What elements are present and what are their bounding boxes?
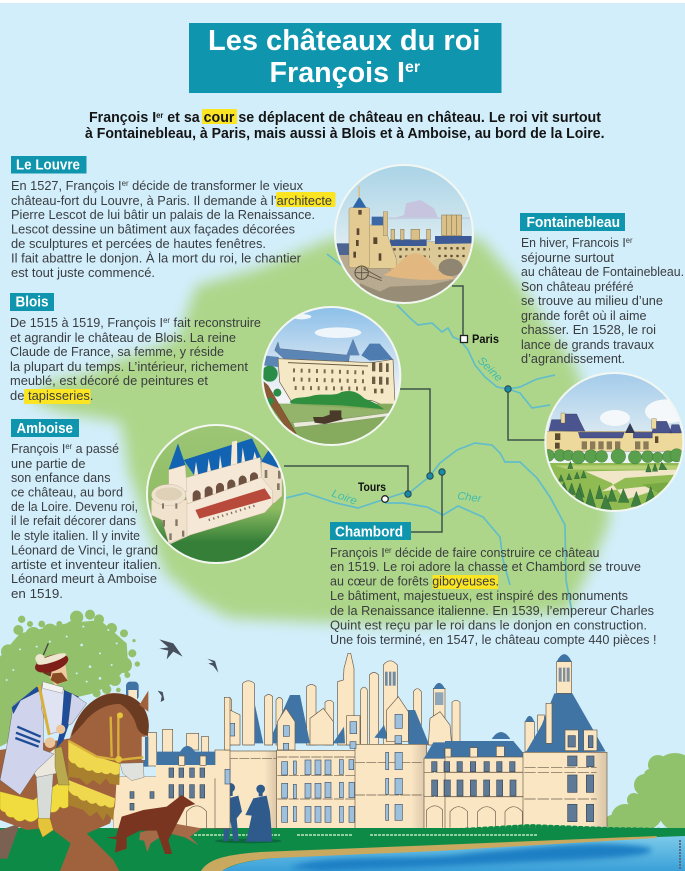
highlight — [24, 389, 90, 404]
heading: Fontainebleau — [526, 214, 620, 231]
body text: François I — [330, 545, 387, 560]
body text — [10, 315, 261, 403]
illustration: right tree — [605, 753, 685, 832]
sand bank — [201, 836, 657, 871]
marker: Tours — [382, 496, 388, 502]
body text: chasser. En 1528, le roi — [521, 322, 656, 337]
label: Tours: Tours — [358, 480, 386, 494]
body text: De 1515 à 1519, François I — [10, 315, 167, 330]
river labels — [330, 355, 505, 508]
illustration: François Ier on horseback — [0, 643, 149, 871]
body text: meublé, est décoré de peintures et — [10, 373, 208, 388]
blue roofs — [255, 695, 429, 745]
body text — [11, 441, 161, 601]
lantern — [557, 654, 572, 693]
body text: Une fois terminé, en 1547, le château compte 440 pièces ! — [330, 632, 656, 647]
body text: château-fort du Louvre, à Paris. Il demande à l’architecte — [11, 193, 332, 208]
body text: de la Loire. Devenu roi, — [11, 499, 138, 514]
body text: au cœur de forêts giboyeuses. — [330, 574, 499, 588]
panel: Le Louvre — [11, 156, 336, 280]
wing — [445, 741, 525, 758]
body text: a passé — [72, 441, 119, 456]
label: Paris: Paris — [472, 332, 499, 346]
body text: décide de transformer le vieux — [129, 178, 303, 193]
intro text: François I — [89, 109, 160, 126]
map markers — [358, 332, 511, 502]
towers and body — [217, 751, 277, 828]
heading: Amboise — [16, 420, 73, 437]
title: Les châteaux du roi — [208, 25, 480, 57]
body text: Léonard meurt à Amboise — [11, 571, 157, 586]
body text: er — [626, 236, 633, 245]
illustration: couple silhouettes — [215, 783, 282, 843]
king — [0, 643, 87, 837]
yellow trappings — [0, 712, 143, 822]
panel: Amboise — [11, 419, 161, 601]
title: François I — [270, 57, 406, 89]
body text: er — [163, 316, 170, 325]
intro text — [85, 109, 604, 142]
body text: fait reconstruire — [170, 315, 261, 330]
illustration: distant wing of castle — [113, 697, 230, 828]
illustration: Chambord castle, right wing and tower — [444, 654, 607, 828]
body text: d’agrandissement. — [521, 351, 625, 366]
illustration: Chambord castle, left and centre — [217, 653, 460, 828]
body text: en 1519. — [11, 586, 63, 601]
river labels: Cher — [457, 490, 483, 505]
round tower — [523, 752, 607, 828]
title: er — [405, 59, 420, 76]
body text: de sculptures et percées de hautes fenêtres. — [11, 236, 266, 251]
body text: Léonard de Vinci, le grand — [11, 542, 158, 558]
body text: artiste et inventeur italien. — [11, 557, 161, 572]
body text: une partie de — [11, 456, 86, 471]
illustration: Fontainebleau medallion — [544, 372, 684, 512]
intro text: à Fontainebleau, à Paris, mais aussi à Blois et à Amboise, au bord de la Loire. — [85, 125, 604, 142]
body text — [11, 178, 332, 280]
intro text: er — [156, 111, 163, 120]
body text: ce château, au bord — [11, 484, 123, 500]
body text: Quint est reçu par le roi dans le donjon en construction. — [330, 618, 647, 632]
body text: Il fait abattre le donjon. À la mort du roi, le chantier — [11, 250, 302, 266]
body text: En hiver, Francois I — [521, 235, 632, 250]
body text: est tout juste commencé. — [11, 265, 155, 280]
marker: Paris — [460, 336, 468, 342]
body text: la plupart du temps. L’intérieur, richement — [10, 359, 248, 374]
body text: il le refait décorer dans — [11, 513, 136, 528]
body text: de tapisseries. — [10, 388, 94, 403]
intro text: et sa cour se déplacent de château en château. Le roi vit surtout — [163, 109, 601, 126]
illustration: tree behind king — [0, 610, 140, 747]
body text: François I — [11, 441, 68, 456]
small corner turret — [525, 715, 544, 752]
body text: En 1527, François I — [11, 178, 124, 193]
rivers — [286, 254, 572, 612]
highlight — [432, 575, 498, 589]
body text: de la Renaissance italienne. En 1539, l’empereur Charles — [330, 603, 654, 618]
chimneys and skyline — [225, 653, 460, 745]
illustration: Louvre medallion — [334, 164, 474, 304]
body text: Lescot dessine un bâtiment aux façades décorées — [11, 222, 295, 236]
body text: Le bâtiment, majestueux, est inspiré des monuments — [330, 588, 628, 603]
body text: er — [122, 179, 129, 188]
body text: le style italien. Il y invite — [11, 528, 140, 543]
river labels: Loire — [330, 488, 359, 508]
body text: séjourne surtout — [521, 250, 614, 265]
panel: Fontainebleau — [520, 213, 684, 366]
body text: se trouve au milieu d’une — [521, 293, 663, 308]
river labels: Seine — [475, 355, 505, 384]
map of France — [30, 238, 610, 626]
title — [189, 23, 502, 93]
body text: Pierre Lescot de lui bâtir un palais de la Renaissance. — [11, 207, 315, 222]
dormers and skyline mass — [227, 697, 452, 750]
heading: Blois — [16, 294, 48, 310]
water — [222, 836, 685, 871]
body text: grande forêt où il aime — [521, 308, 646, 323]
illustration: Amboise medallion — [147, 425, 285, 563]
heading: Chambord — [335, 524, 403, 540]
illustration: ground, sand and water — [0, 826, 685, 871]
body text — [330, 545, 656, 647]
body text: et agrandir le château de Blois. La reine — [10, 330, 236, 345]
body text: décide de faire construire ce château — [392, 545, 600, 560]
illustration: birds — [158, 639, 218, 702]
horse — [0, 691, 149, 871]
highlight — [276, 192, 336, 207]
body text: er — [65, 442, 72, 451]
body text: Son château préféré — [521, 279, 634, 294]
panel: Chambord — [330, 522, 656, 647]
illustration: greyhounds — [106, 795, 202, 854]
body text: son enfance dans — [11, 470, 111, 485]
body text — [521, 235, 684, 366]
illustration: Blois medallion — [261, 306, 402, 446]
body text: lance de grands travaux — [521, 337, 654, 352]
castle location dots — [405, 386, 511, 497]
conical roof — [525, 693, 606, 754]
grass lines — [194, 834, 537, 836]
heading: Le Louvre — [16, 156, 80, 174]
body text: er — [385, 546, 392, 555]
panel: Blois — [10, 293, 261, 404]
connector lines — [284, 286, 546, 532]
body text: Claude de France, sa femme, y réside — [10, 344, 224, 359]
body text: en 1519. Le roi adore la chasse et Chambord se trouve — [330, 559, 641, 574]
windows — [225, 714, 402, 822]
